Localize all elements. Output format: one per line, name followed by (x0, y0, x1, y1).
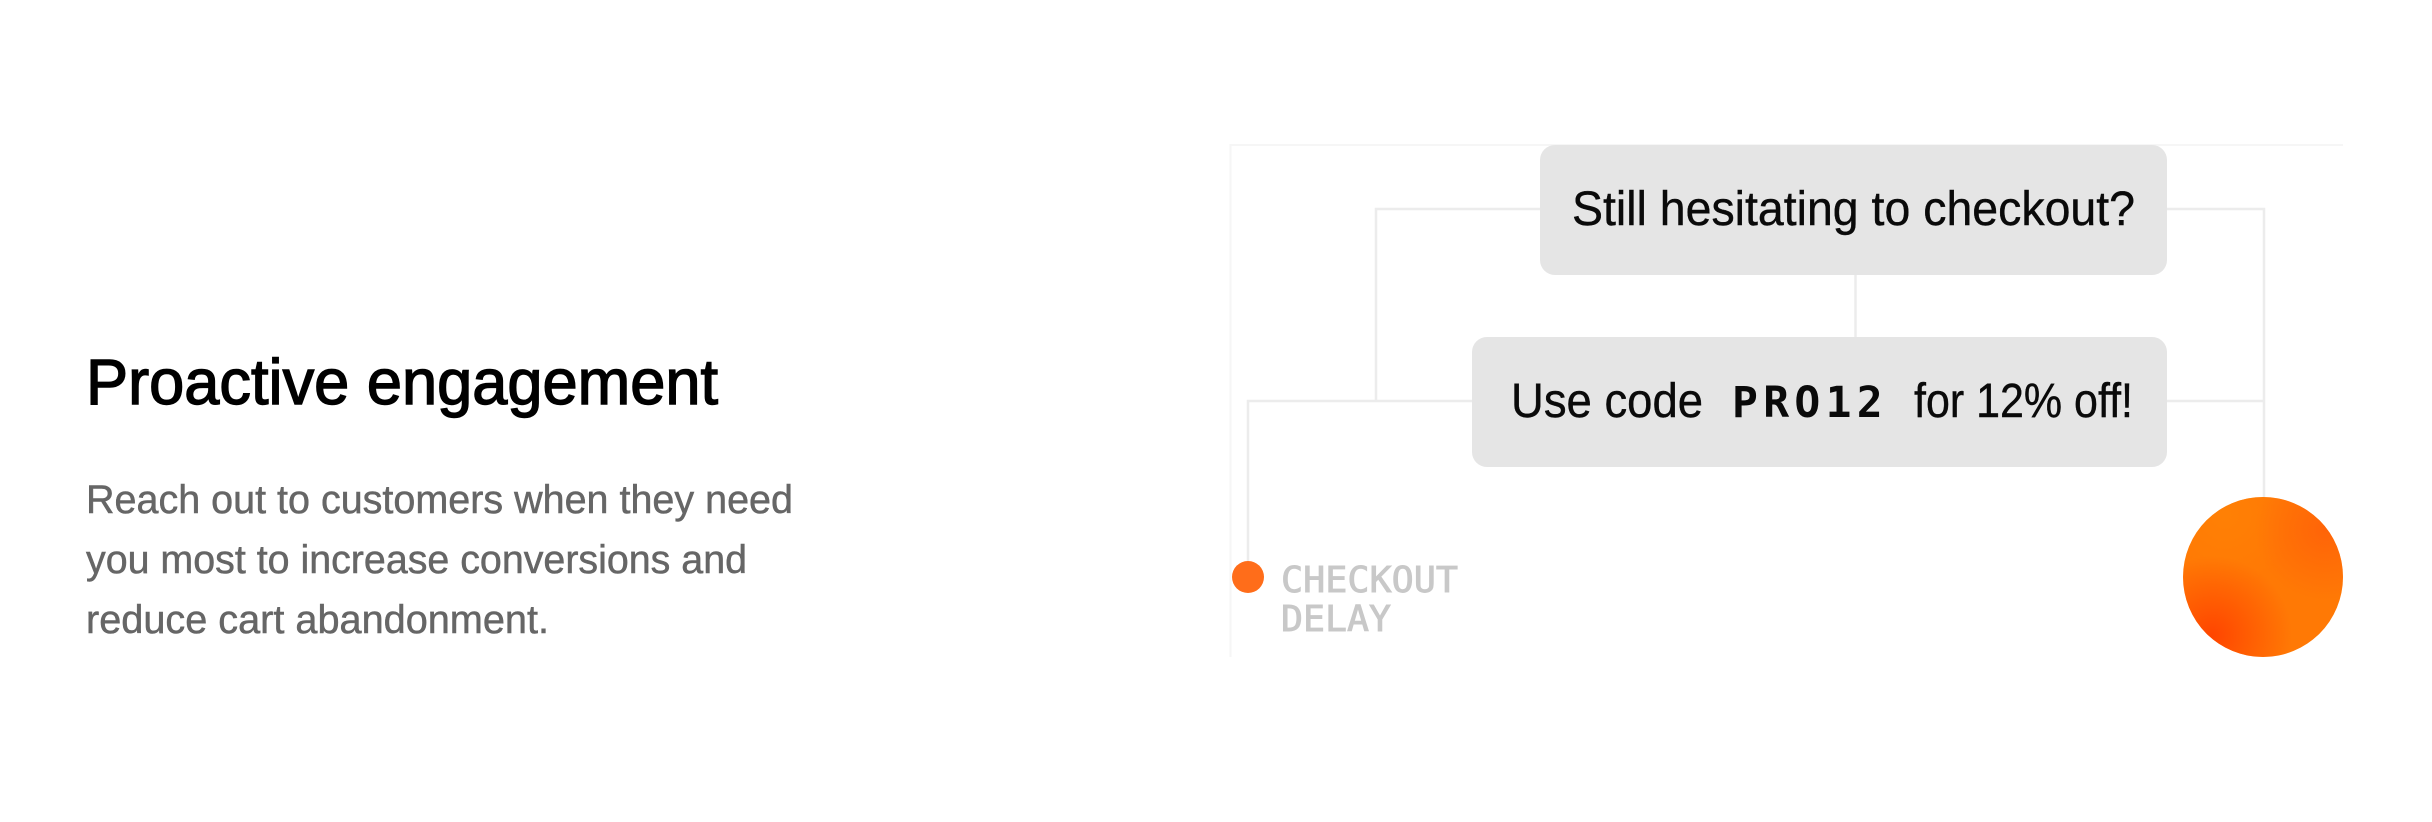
infographic canvas (86, 144, 2343, 657)
gradient orb (2183, 497, 2343, 657)
body text: Reach out to customers when they need (86, 478, 793, 522)
message bubble: discount code: Use code (1511, 375, 1703, 428)
flow diagram (1230, 145, 2343, 657)
trigger label (1281, 560, 1458, 640)
body text: you most to increase conversions and (86, 538, 747, 582)
body text: reduce cart abandonment. (86, 598, 549, 642)
message bubble: discount code (1472, 337, 2167, 467)
trigger dot (1232, 561, 1264, 593)
trigger label: DELAY (1281, 599, 1391, 640)
text panel (86, 346, 793, 642)
message bubble: discount code: for 12% off! (1914, 375, 2133, 428)
message bubble: discount code: PRO12 (1732, 378, 1888, 428)
body text (86, 478, 793, 642)
message bubble: hesitation prompt: Still hesitating to checkout? (1572, 183, 2135, 236)
trigger label: CHECKOUT (1281, 560, 1458, 601)
heading: Proactive engagement (86, 346, 718, 418)
message bubble: hesitation prompt (1540, 145, 2167, 275)
